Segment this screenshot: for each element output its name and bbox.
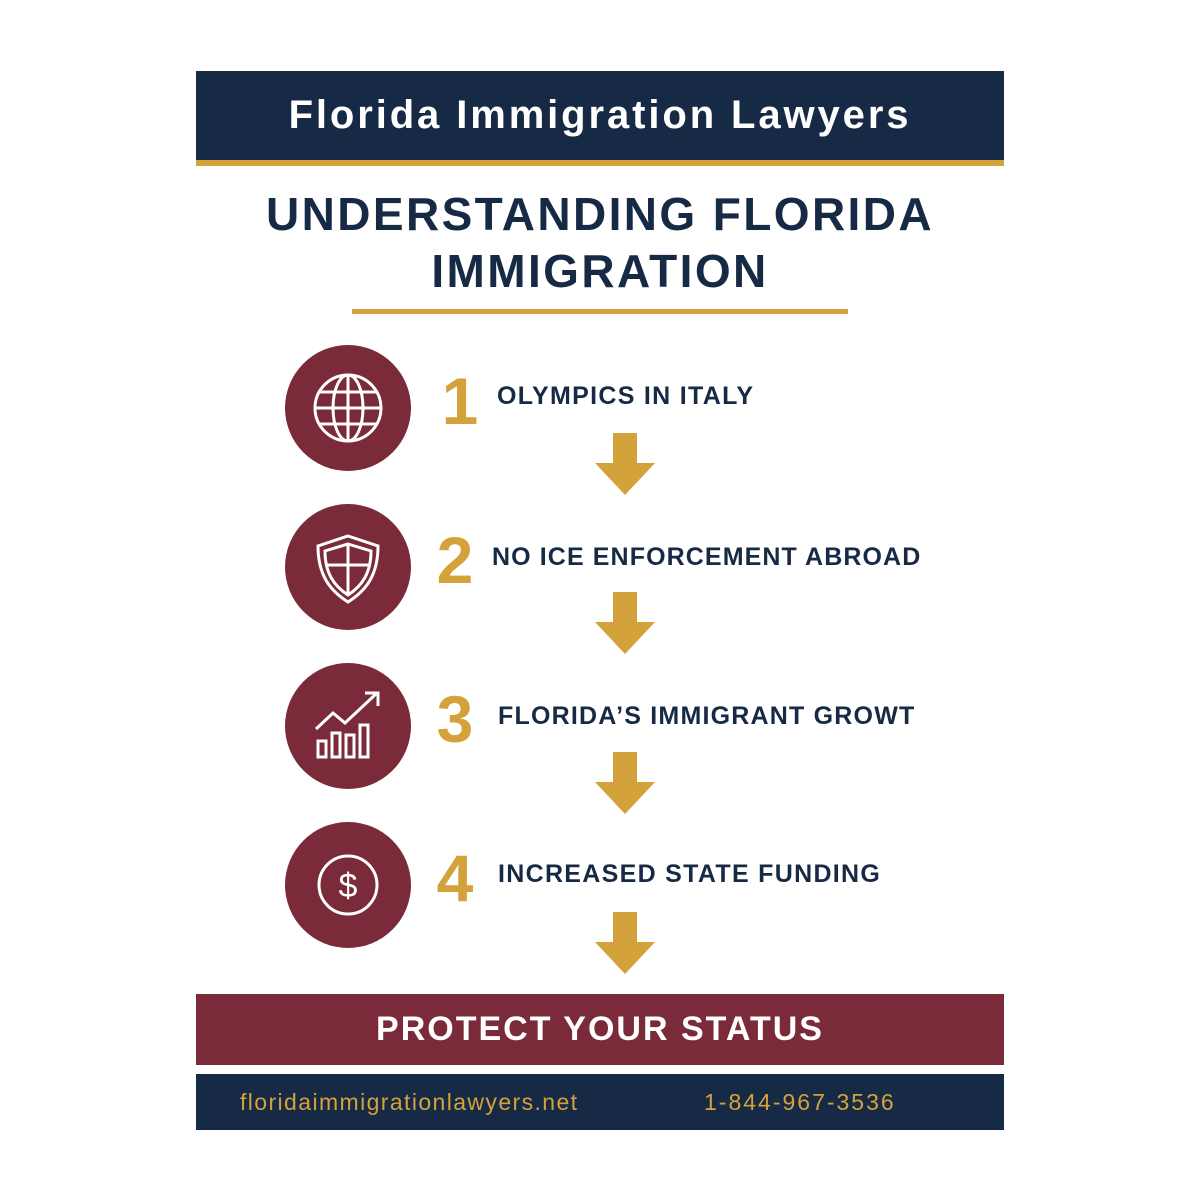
number 3: 3 bbox=[437, 682, 473, 756]
arrow 4 bbox=[595, 912, 655, 974]
icon: shield bbox=[285, 504, 411, 630]
phone: 1-844-967-3536 bbox=[704, 1089, 896, 1115]
arrow 2 bbox=[595, 592, 655, 654]
step 3 bbox=[285, 663, 915, 789]
number 4: 4 bbox=[437, 841, 473, 915]
arrow 1 bbox=[595, 433, 655, 495]
icon: dollar: $ bbox=[339, 867, 358, 905]
call to action banner bbox=[196, 994, 1004, 1065]
label 3: FLORIDA’S IMMIGRANT GROWT bbox=[498, 702, 915, 730]
title bbox=[266, 188, 934, 297]
title underline bbox=[352, 309, 848, 314]
icon: dollar bbox=[285, 822, 411, 948]
website: floridaimmigrationlawyers.net bbox=[240, 1089, 578, 1115]
header bar: Florida Immigration Lawyers bbox=[289, 93, 911, 137]
label 4: INCREASED STATE FUNDING bbox=[498, 860, 881, 888]
step 1 bbox=[285, 345, 754, 471]
header bar bbox=[196, 71, 1004, 166]
footer contact bar bbox=[196, 1074, 1004, 1130]
icon: growth chart bbox=[285, 663, 411, 789]
icon: globe bbox=[285, 345, 411, 471]
step 2 bbox=[285, 504, 921, 630]
arrow 3 bbox=[595, 752, 655, 814]
call to action banner: PROTECT YOUR STATUS bbox=[376, 1010, 824, 1048]
number 2: 2 bbox=[437, 523, 473, 597]
label 1: OLYMPICS IN ITALY bbox=[497, 382, 754, 410]
step 4 bbox=[285, 822, 881, 948]
title: UNDERSTANDING FLORIDA bbox=[266, 188, 934, 240]
number 1: 1 bbox=[442, 364, 478, 438]
title: IMMIGRATION bbox=[431, 245, 769, 297]
label 2: NO ICE ENFORCEMENT ABROAD bbox=[492, 543, 921, 571]
